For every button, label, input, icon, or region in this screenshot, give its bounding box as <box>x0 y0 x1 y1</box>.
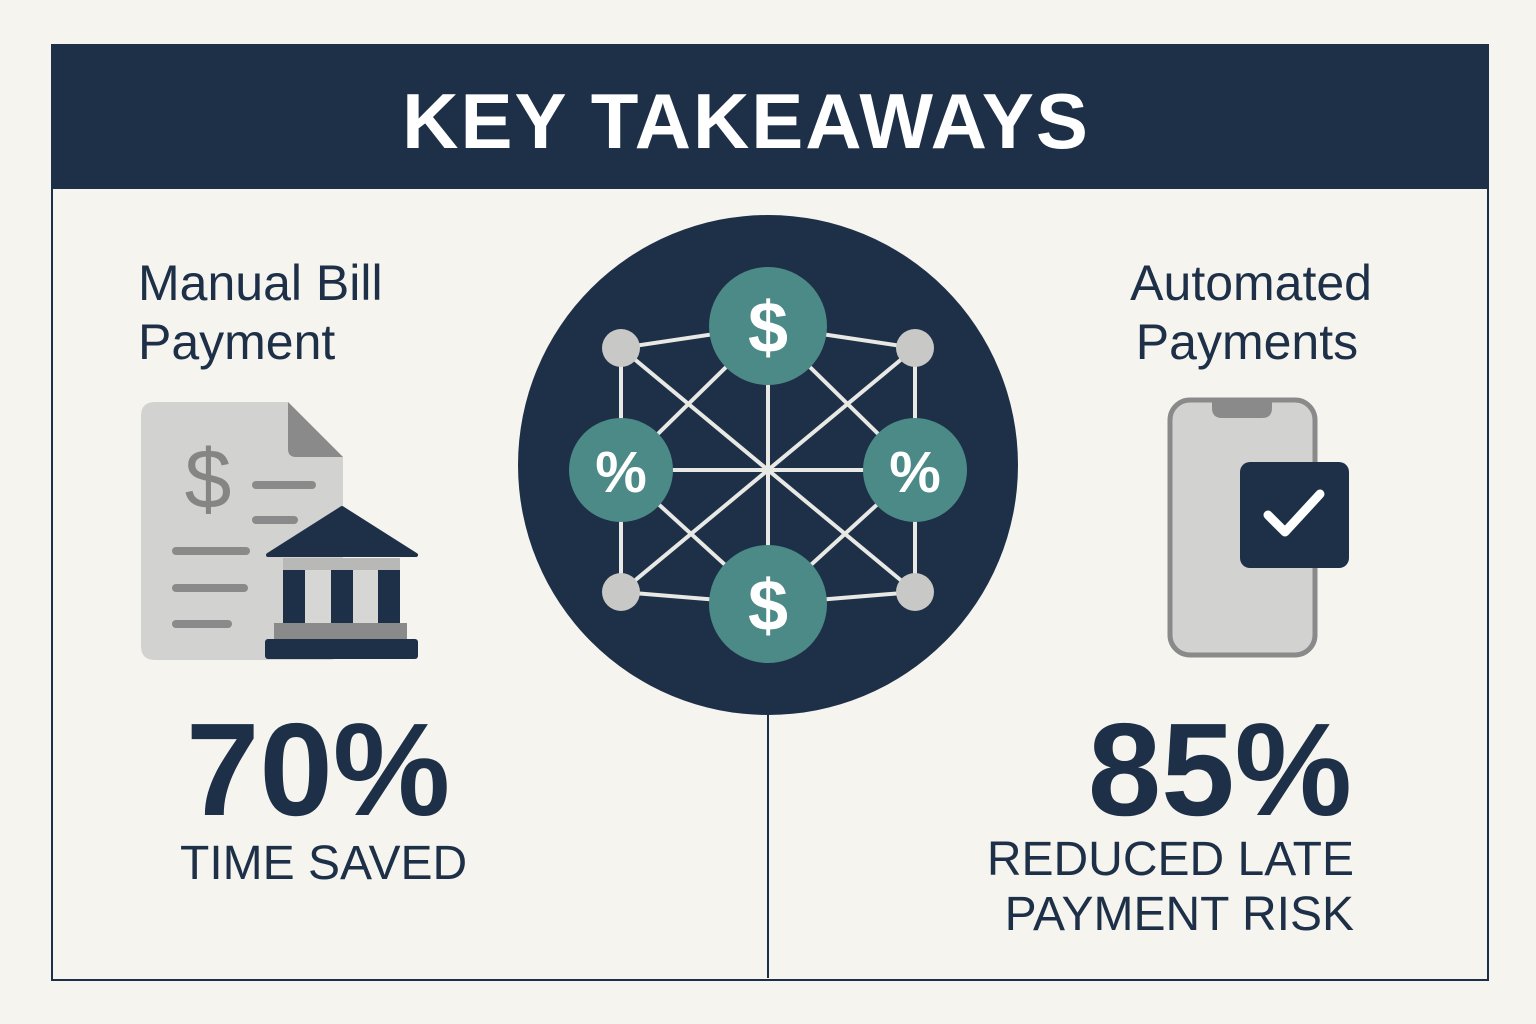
network circle: $ <box>748 288 788 368</box>
heading: automated: Automated <box>1130 255 1372 311</box>
network circle: % <box>595 440 647 505</box>
label: time saved: TIME SAVED <box>180 837 467 890</box>
stat: 70%: 70% <box>186 696 450 843</box>
heading: manual: Payment <box>138 314 335 370</box>
label: reduced risk: REDUCED LATE <box>987 833 1354 886</box>
stat: 85%: 85% <box>1088 696 1352 843</box>
icon: bill and bank <box>141 402 418 660</box>
heading: manual: Manual Bill <box>138 255 383 311</box>
network circle: % <box>889 440 941 505</box>
title: KEY TAKEAWAYS <box>402 77 1090 165</box>
icon: phone with check <box>1170 400 1349 655</box>
divider line <box>767 700 769 978</box>
label: reduced risk: PAYMENT RISK <box>1005 888 1354 941</box>
network circle: $ <box>748 566 788 646</box>
icon: bill and bank: $ <box>185 432 231 526</box>
heading: manual <box>138 255 383 370</box>
heading: automated: Payments <box>1136 314 1358 370</box>
label: reduced risk <box>987 833 1354 941</box>
heading: automated <box>1130 255 1372 370</box>
header band <box>51 44 1489 189</box>
